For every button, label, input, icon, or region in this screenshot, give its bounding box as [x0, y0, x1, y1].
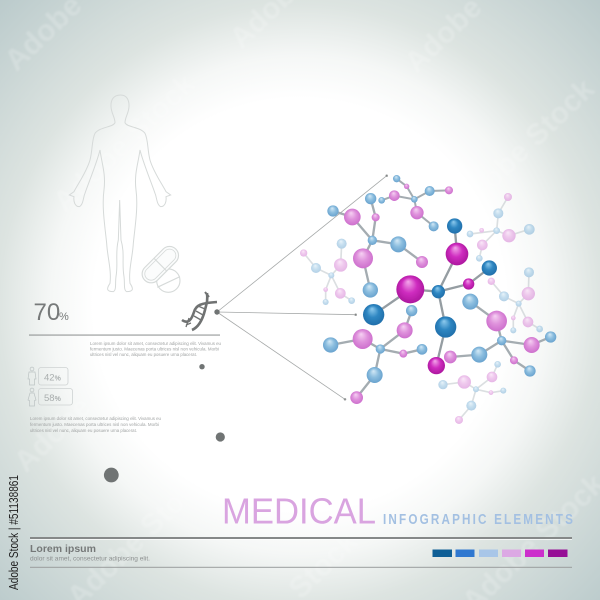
title: MEDICAL: MEDICAL — [222, 490, 376, 532]
watermark: Adobe — [268, 324, 358, 412]
text block: upper paragraph — [29, 335, 221, 357]
footer rule top — [30, 537, 572, 540]
text block: lower paragraph — [30, 416, 161, 433]
molecule: upper left cluster — [327, 193, 428, 298]
stat box: 42% — [38, 368, 68, 385]
molecule: top cluster — [378, 175, 453, 231]
footer text: Lorem ipsum: dolor sit amet, consectetur adipiscing elit. — [30, 557, 150, 563]
text block: upper paragraph: Lorem ipsum dolor sit amet, consectetur adipiscing elit. Vivamus eu — [90, 341, 221, 346]
icon: male figure — [28, 367, 36, 385]
molecule: lower right cluster — [444, 294, 556, 377]
footer text: Lorem ipsum — [30, 543, 150, 563]
pointer lines — [217, 175, 388, 400]
stat box: 58%: 58% — [44, 393, 62, 404]
stat box: 58% — [38, 388, 72, 405]
text block: lower paragraph: fermentum justo. Maecenas porta ultrices nisl non vehicula. Morbi — [30, 422, 159, 427]
molecule: central cluster — [363, 218, 497, 374]
molecule: faded top right — [467, 193, 535, 262]
colour swatches — [432, 550, 568, 557]
icon: DNA helix — [182, 292, 217, 330]
molecule: lower left cluster — [323, 305, 427, 404]
vertical stock credit: Adobe Stock | #51138861 — [7, 475, 21, 590]
watermark: Adobe Stock — [446, 72, 600, 224]
molecule: faded bottom — [438, 361, 506, 424]
statistic: 70%: 70 — [34, 299, 60, 326]
watermark: Adobe Stock — [47, 67, 202, 219]
dots — [104, 309, 225, 482]
text block: upper paragraph: fermentum justo. Maecenas porta ultrices nisl non vehicula. Morbi — [90, 346, 219, 352]
stat box: 42%: 42% — [44, 372, 62, 384]
text block: lower paragraph: Lorem ipsum dolor sit amet, consectetur adipiscing elit. Vivamus eu — [30, 416, 161, 421]
text block: upper paragraph: ultrices nisl vel nunc, aliquam eu posuere urna placerat. — [90, 352, 197, 357]
watermark: Adobe Stock — [8, 327, 163, 479]
subtitle: infographic elements: INFOGRAPHIC ELEMENTS — [383, 511, 573, 527]
watermark: Adobe Stock — [204, 117, 359, 269]
statistic: 70%: % — [59, 311, 69, 323]
footer text: Lorem ipsum: Lorem ipsum — [30, 543, 96, 555]
icon: human body outline — [69, 95, 171, 292]
footer rule bottom — [30, 567, 572, 568]
watermark: Adobe — [418, 384, 508, 472]
icon: female figure — [28, 388, 36, 406]
icon: pills — [138, 243, 182, 292]
molecule: faded right middle — [488, 267, 543, 333]
text block: lower paragraph: ultrices nisl vel nunc, aliquam eu posuere urna placerat. — [30, 428, 137, 433]
molecule: faded left — [300, 239, 355, 305]
